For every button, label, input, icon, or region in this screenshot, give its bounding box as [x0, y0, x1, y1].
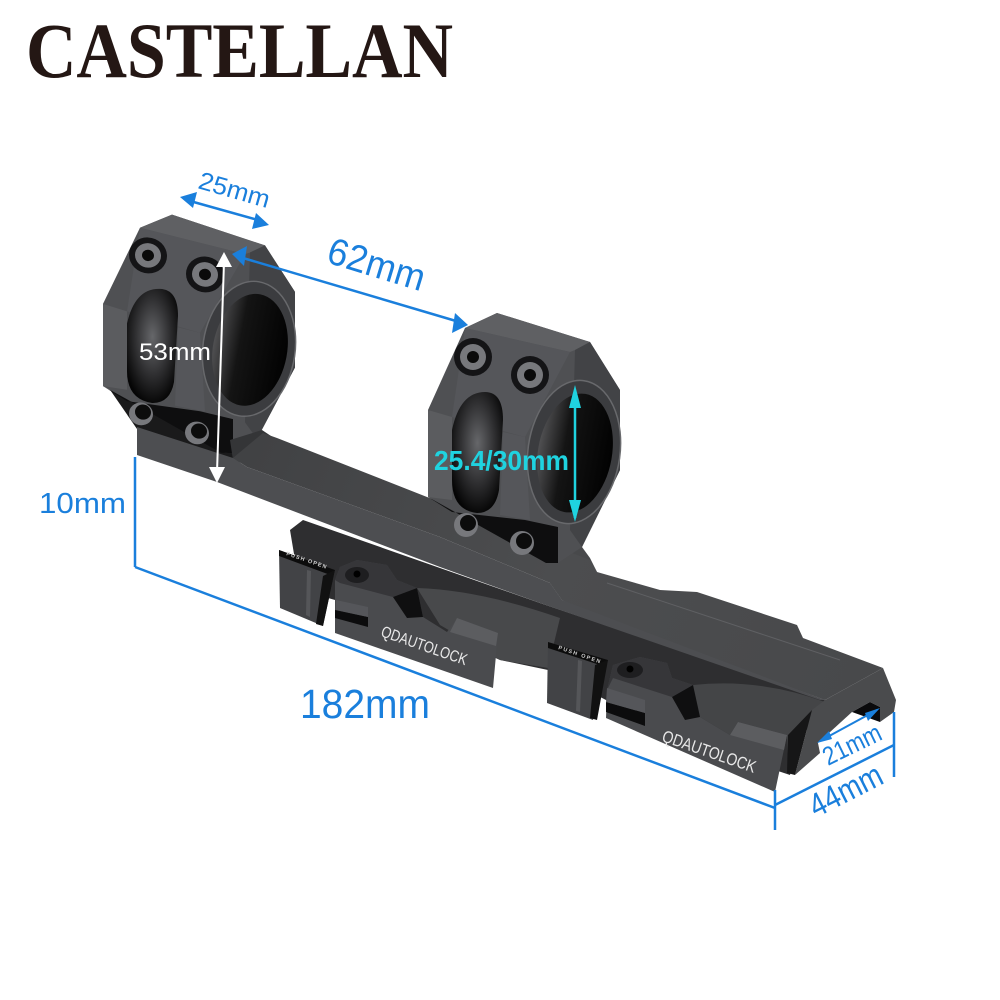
clamp 1: [279, 550, 498, 688]
dimension: 182mm: 182mm: [300, 681, 430, 727]
rail front plate: [137, 427, 825, 700]
dimension: 25mm: [180, 167, 273, 229]
ring 1 neck: [230, 430, 277, 468]
dimension: 44mm: [775, 712, 894, 824]
rail end face: [795, 668, 896, 775]
push tab: [547, 642, 608, 720]
rail highlight: [607, 583, 840, 660]
dimension: 10mm: [39, 457, 135, 567]
clamp 1: PUSH OPEN: [285, 551, 327, 571]
ring 2 neck: [546, 530, 607, 620]
clamp label: QDAUTOLOCK: [379, 624, 470, 669]
dimension: 53mm: 53mm: [139, 339, 211, 366]
dimension: 182mm: [135, 567, 775, 830]
dimension: 62mm: 62mm: [322, 230, 430, 300]
lever body: [606, 657, 787, 792]
recess behind clamp 2: [693, 683, 825, 772]
ring 1 underside: [104, 381, 240, 460]
clamp label: QDAUTOLOCK: [660, 727, 759, 777]
dimension: 62mm: [232, 230, 468, 333]
lower base: [290, 520, 825, 775]
dimension: 44mm: 44mm: [802, 756, 889, 824]
clamp 2: [547, 642, 787, 792]
title: CASTELLAN: [26, 8, 453, 95]
dimension: tube diameter: 25.4/30mm: [434, 445, 569, 476]
lever body: [335, 560, 498, 688]
dimension: tube diameter: [434, 385, 581, 522]
clamp 2: PUSH OPEN: [557, 645, 601, 665]
recess behind clamp 1: [417, 588, 560, 668]
dimension: 10mm: 10mm: [39, 488, 126, 520]
dimension: 25mm: 25mm: [195, 167, 273, 214]
dimension: 53mm: [139, 252, 232, 483]
rail top surface: [233, 433, 883, 700]
product: scope mount: [103, 212, 896, 792]
push tab: [279, 550, 335, 626]
ring 1: [103, 212, 305, 456]
ring 2: [428, 313, 630, 563]
dimension: 21mm: 21mm: [817, 717, 886, 771]
